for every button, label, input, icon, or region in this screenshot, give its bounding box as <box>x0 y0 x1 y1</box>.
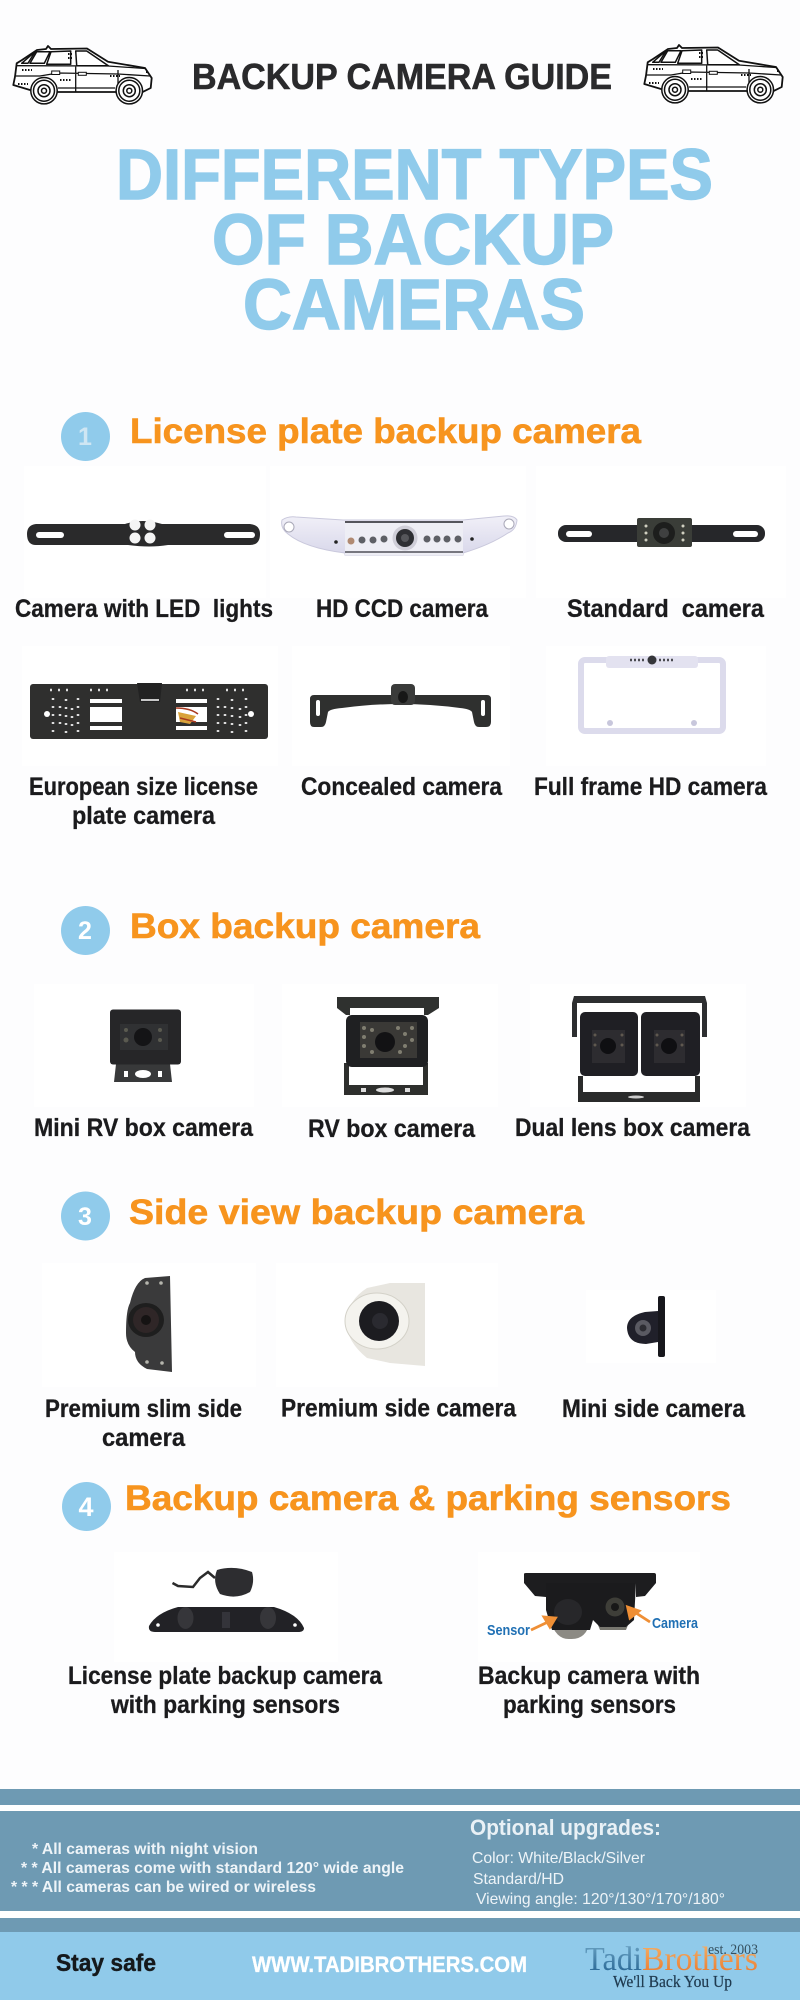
label: RV box camera <box>308 1115 476 1143</box>
label: Backup camera with <box>478 1662 700 1690</box>
label <box>45 1395 242 1452</box>
label: with parking sensors <box>110 1691 340 1719</box>
number badge 3: 3 <box>78 1203 92 1231</box>
label: HD CCD camera <box>316 595 489 623</box>
heading: license plate backup camera: License plate backup camera <box>130 412 642 451</box>
number badge 1: 1 <box>78 423 92 451</box>
logo: TadiBrothers <box>585 1941 758 1991</box>
number badge 4 <box>62 1482 111 1531</box>
panel: section 3 side view cameras <box>45 1192 746 1452</box>
main title <box>116 136 713 345</box>
optional upgrades: Optional upgrades: <box>470 1815 661 1840</box>
RV box camera <box>337 997 439 1095</box>
notes list: * All cameras with night vision <box>32 1841 258 1858</box>
number badge 4: 4 <box>78 1492 94 1522</box>
camera with LED lights <box>27 520 260 546</box>
European size camera <box>30 683 268 739</box>
panel: footer notes <box>0 1789 800 1932</box>
optional upgrades: Viewing angle: 120°/130°/170°/180° <box>476 1891 725 1908</box>
notes list <box>11 1841 404 1896</box>
mini side camera <box>627 1296 665 1357</box>
label: plate camera <box>72 802 216 830</box>
label: Mini side camera <box>562 1395 746 1423</box>
icon: car left <box>13 46 152 104</box>
panel: section 1 license plate cameras <box>15 412 768 830</box>
notes list: * * * All cameras can be wired or wireless <box>11 1879 316 1896</box>
backup camera with sensor <box>487 1573 699 1639</box>
label: Full frame HD camera <box>534 773 768 801</box>
icon: car right <box>644 45 783 103</box>
label: License plate backup camera <box>68 1662 383 1690</box>
standard camera <box>558 518 765 547</box>
optional upgrades: Color: White/Black/Silver <box>472 1850 646 1867</box>
label: Concealed camera <box>301 773 503 801</box>
full frame HD camera <box>581 656 723 731</box>
optional upgrades: Standard/HD <box>473 1871 564 1888</box>
panel: section 4 parking sensors <box>62 1479 731 1719</box>
main title: CAMERAS <box>243 266 585 345</box>
header title: BACKUP CAMERA GUIDE <box>192 56 612 97</box>
main title: OF BACKUP <box>212 201 614 280</box>
logo: TadiBrothers: Brothers <box>642 1941 758 1978</box>
stay safe: Stay safe <box>56 1950 156 1977</box>
premium slim side camera <box>126 1276 172 1372</box>
notes list: * * All cameras come with standard 120° wide angle <box>21 1860 404 1877</box>
label: Standard camera <box>567 595 765 623</box>
sensor label: Sensor <box>487 1622 530 1639</box>
dual lens box camera <box>572 996 707 1102</box>
label: Premium side camera <box>281 1394 517 1422</box>
heading: backup camera and parking sensors: Backup camera & parking sensors <box>125 1479 731 1518</box>
logo: TadiBrothers: est. 2003 <box>708 1942 758 1958</box>
label <box>68 1662 383 1719</box>
arrow: sensor <box>531 1617 556 1630</box>
HD CCD camera <box>282 516 517 555</box>
label: parking sensors <box>503 1691 676 1719</box>
label: Premium slim side <box>45 1395 242 1423</box>
number badge 2: 2 <box>78 917 92 945</box>
panel: section 2 box cameras <box>34 906 751 1143</box>
panel: bottom bar <box>0 1932 800 2000</box>
license plate camera with sensors <box>149 1568 304 1632</box>
optional upgrades <box>470 1815 725 1908</box>
heading: box backup camera: Box backup camera <box>130 907 481 946</box>
logo: TadiBrothers: Tadi <box>585 1941 642 1978</box>
heading: side view backup camera: Side view backup camera <box>129 1193 585 1232</box>
camera label: Camera <box>652 1615 699 1632</box>
label: Mini RV box camera <box>34 1114 254 1142</box>
number badge 3 <box>61 1192 110 1240</box>
concealed camera <box>310 684 491 727</box>
label: Dual lens box camera <box>515 1114 751 1142</box>
label <box>29 773 258 830</box>
label: Camera with LED lights <box>15 595 273 623</box>
website: WWW.TADIBROTHERS.COM <box>252 1952 527 1977</box>
label: camera <box>102 1424 186 1452</box>
arrow: camera <box>628 1607 650 1622</box>
premium side camera <box>345 1283 425 1366</box>
logo: TadiBrothers: We'll Back You Up <box>613 1972 732 1991</box>
number badge 2 <box>61 906 110 955</box>
label <box>478 1662 700 1719</box>
label: European size license <box>29 773 258 801</box>
number badge 1 <box>61 412 110 461</box>
main title: DIFFERENT TYPES <box>116 136 713 215</box>
mini RV box camera <box>110 1010 181 1082</box>
